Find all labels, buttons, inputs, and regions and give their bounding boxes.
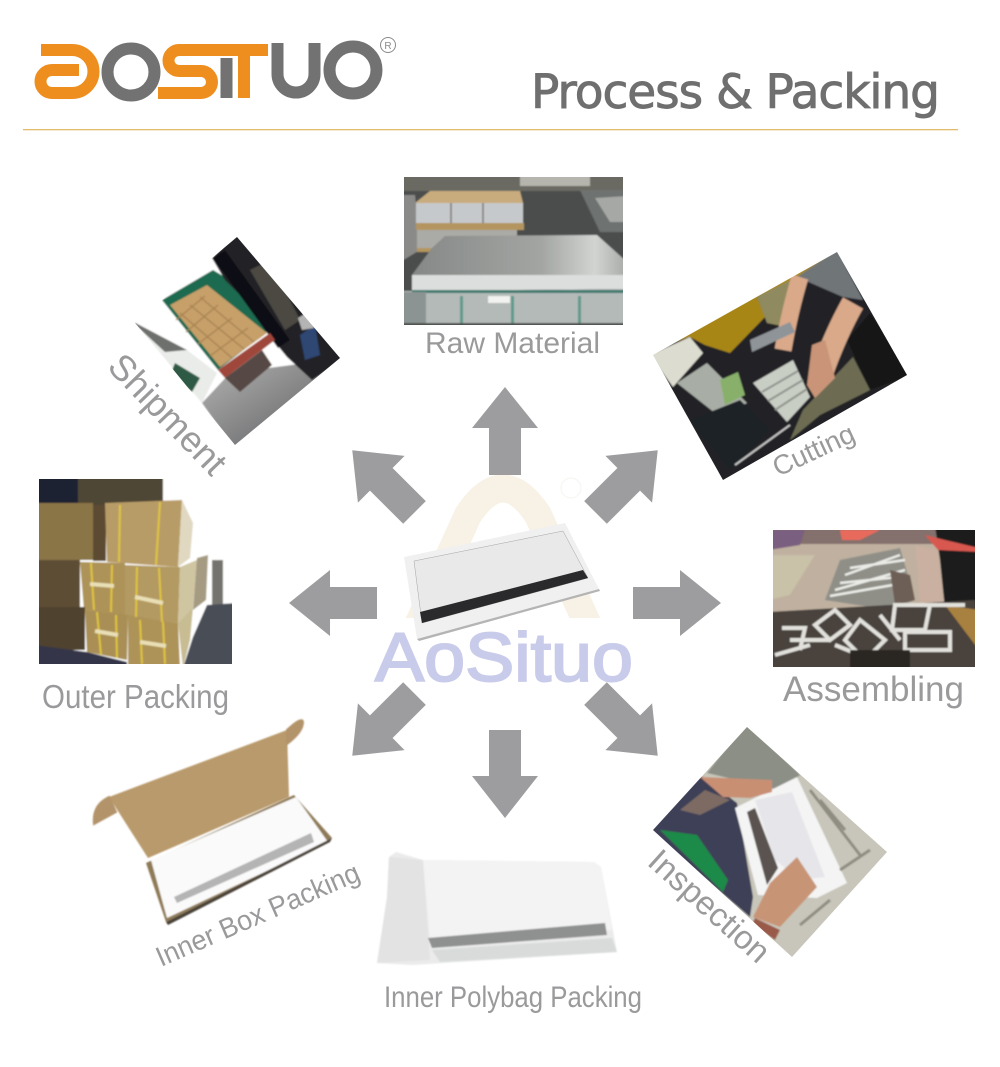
center watermark arch [418, 478, 588, 625]
label: shipment: Shipment [100, 345, 235, 483]
title: Process & Packing [531, 65, 940, 120]
label: raw material: Raw Material [425, 327, 600, 360]
arrow: right [633, 570, 721, 636]
photo: inspection [648, 722, 892, 962]
arrow: left [289, 570, 377, 636]
label: cutting: Cutting [767, 418, 860, 482]
photo: shipment [130, 230, 345, 450]
arrow: up right [572, 427, 681, 536]
label: assembling: Assembling [783, 670, 964, 709]
center watermark text: AoSituo [375, 619, 633, 696]
label: inspection: Inspection [641, 842, 778, 970]
logo: AOSITUO [40, 38, 396, 98]
logo: AOSITUO: R [384, 41, 392, 52]
label: outer packing: Outer Packing [42, 678, 229, 715]
arrow: down right [572, 670, 681, 779]
photo: assembling [769, 526, 979, 671]
arrow: down [472, 730, 538, 818]
photo: cutting [648, 248, 912, 485]
arrow: up [472, 387, 538, 475]
center product: cable cover [404, 523, 600, 641]
photo: inner box packing [94, 720, 332, 925]
label: inner box packing: Inner Box Packing [151, 857, 364, 973]
arrow: down left [329, 670, 438, 779]
label: inner polybag packing: Inner Polybag Packing [384, 981, 642, 1014]
photo: inner polybag packing [377, 852, 617, 965]
photo: raw material [400, 173, 627, 329]
arrow: up left [329, 427, 438, 536]
photo: outer packing [35, 475, 236, 668]
